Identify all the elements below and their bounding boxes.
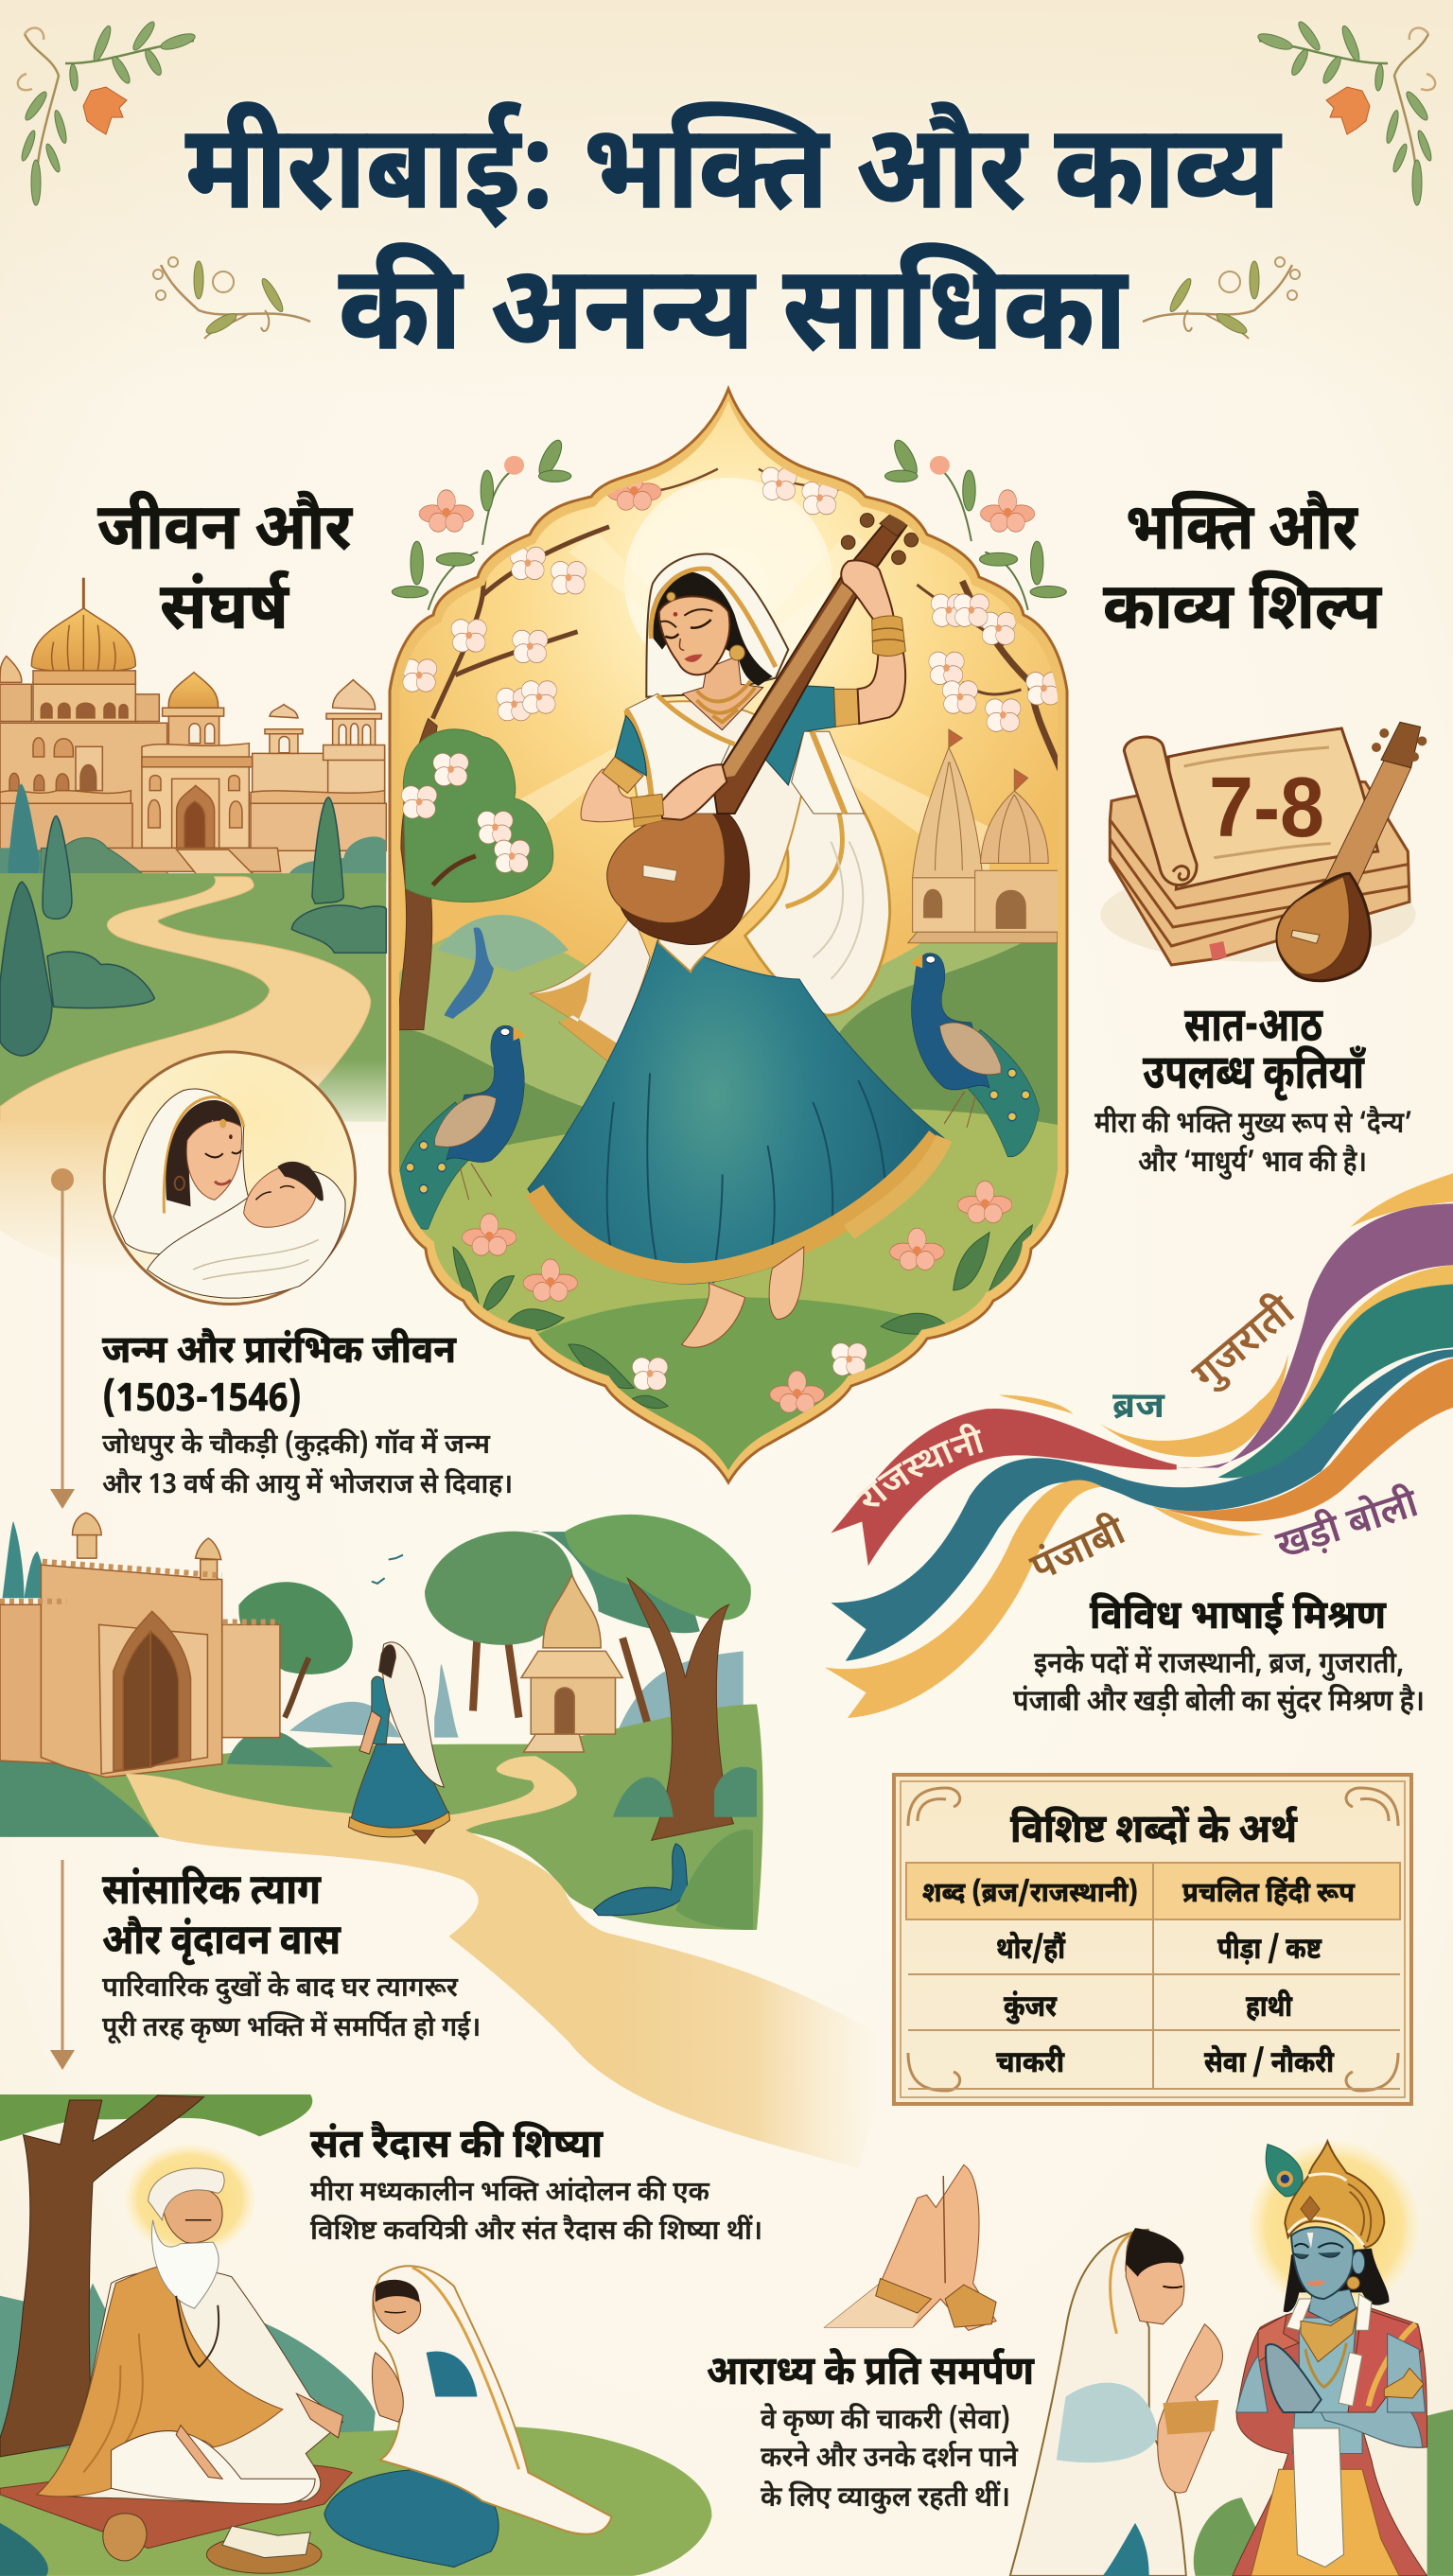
winding path [126,1756,893,2169]
section heading: devotion and poetics: काव्य शिल्प [1103,570,1382,655]
guru halo [125,2145,254,2254]
ribbon label: Punjabi: पंजाबी [1024,1508,1136,1597]
stack of pages [1100,867,1416,962]
far trees [3,1521,45,1598]
raised hand and bangles [841,560,894,622]
upper body in native detail [603,501,920,820]
text block: surrender to the beloved deity: वे कृष्ण की चाकरी (सेवा) [761,2403,1010,2441]
stoles and collar [1348,2308,1422,2412]
illustration: devotional text stack with sitar [1100,722,1427,981]
ribbon label: Rajasthani: राजस्थानी [855,1423,984,1506]
gold lower ribbon [825,1481,1102,1718]
book and pot [206,2535,322,2573]
neck [1308,2289,1356,2322]
peacock feather [1266,2145,1303,2197]
title flourish left [153,257,310,339]
peacock on the ground [594,1844,688,1916]
table cells: चाकरी [996,2045,1065,2084]
ribbon label: Khari Boli: खड़ी बोली [1271,1481,1427,1575]
face [1291,2227,1354,2299]
right arm [1388,2334,1426,2412]
right tree branch [959,579,1058,772]
mother [114,1089,255,1254]
bottom right scene: devotion to Krishna [825,2164,1453,2576]
text block: birth and early life: जन्म और प्रारंभिक जीवन [102,1328,457,1378]
trees and bushes behind [0,784,386,892]
grass foreground [0,2523,48,2576]
disciple woman [324,2469,499,2567]
table cells: कुंजर [1004,1989,1058,2028]
text block: birth and early life: (1503-1546) [102,1377,302,1427]
left forearm [581,768,649,823]
column headings [922,1877,1356,1913]
text block: disciple of Raidas: विशिष्ट कवयित्री और संत रैदास की शिष्या थीं। [310,2215,762,2251]
veil [646,554,788,697]
skirt border [534,1137,937,1273]
corner floral decoration left [18,19,197,205]
playing hand [662,764,726,820]
top blossoms [604,469,849,493]
arch frame [390,389,1067,1482]
table frame [894,1775,1411,2104]
sitar neck [712,517,908,814]
text block: birth and early life [102,1328,513,1504]
palace [0,578,386,875]
right dupatta [744,797,891,1017]
feet [682,1247,804,1347]
open scroll [1168,728,1378,889]
number on scroll: 7-8 [1209,761,1324,855]
medallion: mother and baby [104,1052,356,1304]
baby wrapped [148,1171,345,1298]
text block: renunciation and Vrindavan: पारिवारिक दुखों के बाद घर त्यागरूर [102,1971,459,2007]
table cells: पीड़ा / कष्ट [1217,1932,1322,1971]
halo [1249,2141,1419,2311]
shrine [521,1575,622,1752]
title: की अनन्य साधिका [339,242,1129,396]
right blouse [763,686,835,785]
bottom left scene: guru and disciple [0,2094,711,2576]
text block: available works: और ‘माधुर्य’ भाव की है। [1138,1145,1367,1183]
table cells: थोर/हौं [996,1932,1066,1971]
bushes and ground [0,2283,376,2460]
lawn [0,873,386,1122]
central arch panel [378,378,1088,1514]
Krishna upper body [1236,2141,1426,2412]
text block: surrender to the beloved deity: के लिए व्याकुल रहती थीं। [761,2480,1010,2518]
timeline arrow one [50,1168,75,1509]
text block: available works: उपलब्ध कृतियाँ [1143,1045,1366,1108]
Krishna lower body [1233,2306,1427,2576]
text block: renunciation and Vrindavan [102,1866,481,2047]
frame corner ornaments [908,1788,1398,2091]
bush [1194,2410,1453,2576]
text block: disciple of Raidas [310,2121,762,2251]
praying hands [825,2164,996,2330]
text block: birth and early life: और 13 वर्ष की आयु में भोजराज से दिवाह। [102,1468,513,1504]
mat [0,2463,352,2549]
text block: available works: सात-आठ [1184,999,1323,1060]
path fade below palace garden [0,1121,313,1277]
garden path [0,877,371,1122]
section heading: life and struggle: संघर्ष [160,570,289,655]
torso [1299,2318,1356,2412]
right dupatta strip [792,731,864,814]
title: मीराबाई: भक्ति और काव्य [185,101,1282,255]
hills and ground [399,937,1058,1470]
text block: surrender to the beloved deity [707,2348,1035,2518]
text block: surrender to the beloved deity: करने और उनके दर्शन पाने [761,2441,1019,2479]
foreground foliage [675,1830,753,1930]
ground flowers [463,1214,516,1255]
crenellations [0,1562,280,1622]
walking woman [348,1642,450,1844]
text block: disciple of Raidas: मीरा मध्यकालीन भक्ति आंदोलन की एक [310,2176,710,2212]
hair [649,572,773,686]
section heading: life and struggle: जीवन और [97,491,354,575]
ground plants [453,1225,1032,1409]
left tree [396,719,437,1029]
big tree [627,1578,734,1840]
tree canopy [0,2094,312,2141]
temple [908,729,1059,943]
birds [372,1555,403,1584]
ribbon label: Gujarati: गुजराती [1182,1286,1308,1404]
flowers beside arch [392,434,1066,610]
column headings: शब्द (ब्रज/राजस्थानी) [922,1877,1138,1913]
table cells: हाथी [1246,1989,1293,2028]
lawn fade at right [284,1060,390,1135]
chest drape [626,693,731,814]
title flourish right [1143,257,1300,339]
torso cloth [625,697,813,972]
left arm and folded hands [1236,2356,1268,2412]
corner floral decoration right [1256,19,1435,205]
necklace [1301,2308,1357,2362]
column headings: प्रचलित हिंदी रूप [1182,1877,1356,1913]
gate and walls [0,1513,280,1778]
neck and necklace [683,656,763,730]
section heading: devotion and poetics: भक्ति और [1126,491,1359,575]
sitar [1322,760,1411,896]
red ribbon [831,1409,1177,1566]
bushes and cypress trees [0,797,386,1056]
middle scene: leaving the palace [0,1513,893,2169]
guru [37,2269,342,2503]
arch scene [399,401,1058,1470]
text block: renunciation and Vrindavan: पूरी तरह कृष्ण भक्ति में समर्पित हो गई। [102,2011,481,2047]
gold sliver [1351,1173,1453,1227]
hair [1284,2249,1389,2312]
sitar body [616,805,749,945]
orange ribbon [1164,1358,1453,1521]
text block: language mixture: इनके पदों में राजस्थानी, ब्रज, गुजराती, [1034,1646,1404,1685]
table header row [906,1863,1400,1919]
table: meanings of special words [894,1775,1411,2104]
section heading: life and struggle [97,491,354,655]
sitar head [841,501,920,565]
aged top shading [0,0,1453,397]
text block: renunciation and Vrindavan: सांसारिक त्याग [102,1866,322,1920]
text block: birth and early life: जोधपुर के चौकड़ी (कुद़की) गॉव में जन्म [102,1428,491,1464]
text block: renunciation and Vrindavan: और वृंदावन वास [102,1916,341,1971]
tree trunk [0,2095,204,2457]
gold mid ribbon [1100,1354,1288,1457]
crown [1285,2141,1384,2248]
text block: available works: मीरा की भक्ति मुख्य रूप से ‘दैन्य’ [1094,1106,1412,1145]
section heading: devotion and poetics [1103,491,1382,655]
table cells [996,1932,1335,2084]
table cells: सेवा / नौकरी [1204,2045,1335,2084]
face [659,596,729,675]
ground [0,1705,763,1930]
timeline arrow two [50,1860,75,2070]
table rows grid [908,1863,1400,2089]
teal ribbon [831,1349,1453,1661]
purple ribbon [1177,1203,1453,1468]
illustration: palace and garden path [0,578,386,1122]
small blue bird [444,927,494,1019]
illustration: language ribbons [825,1173,1453,1718]
ribbon label: Braj: ब्रज [1112,1385,1165,1432]
skirt [528,936,944,1284]
peacocks [396,1025,526,1229]
table heading: विशिष्ट शब्दों के अर्थ [1010,1806,1298,1859]
text block: language mixture: विविध भाषाई मिश्रण [1090,1592,1387,1645]
sun rays [520,531,989,870]
text block: available works [1094,999,1412,1183]
title [185,101,1282,396]
left scarf [530,914,650,1062]
text block: surrender to the beloved deity: आराध्य के प्रति समर्पण [707,2348,1035,2401]
woman facing Krishna [1010,2230,1186,2576]
text block: language mixture [1013,1592,1425,1723]
text block: disciple of Raidas: संत रैदास की शिष्या [310,2121,604,2174]
raised arm [858,653,905,724]
